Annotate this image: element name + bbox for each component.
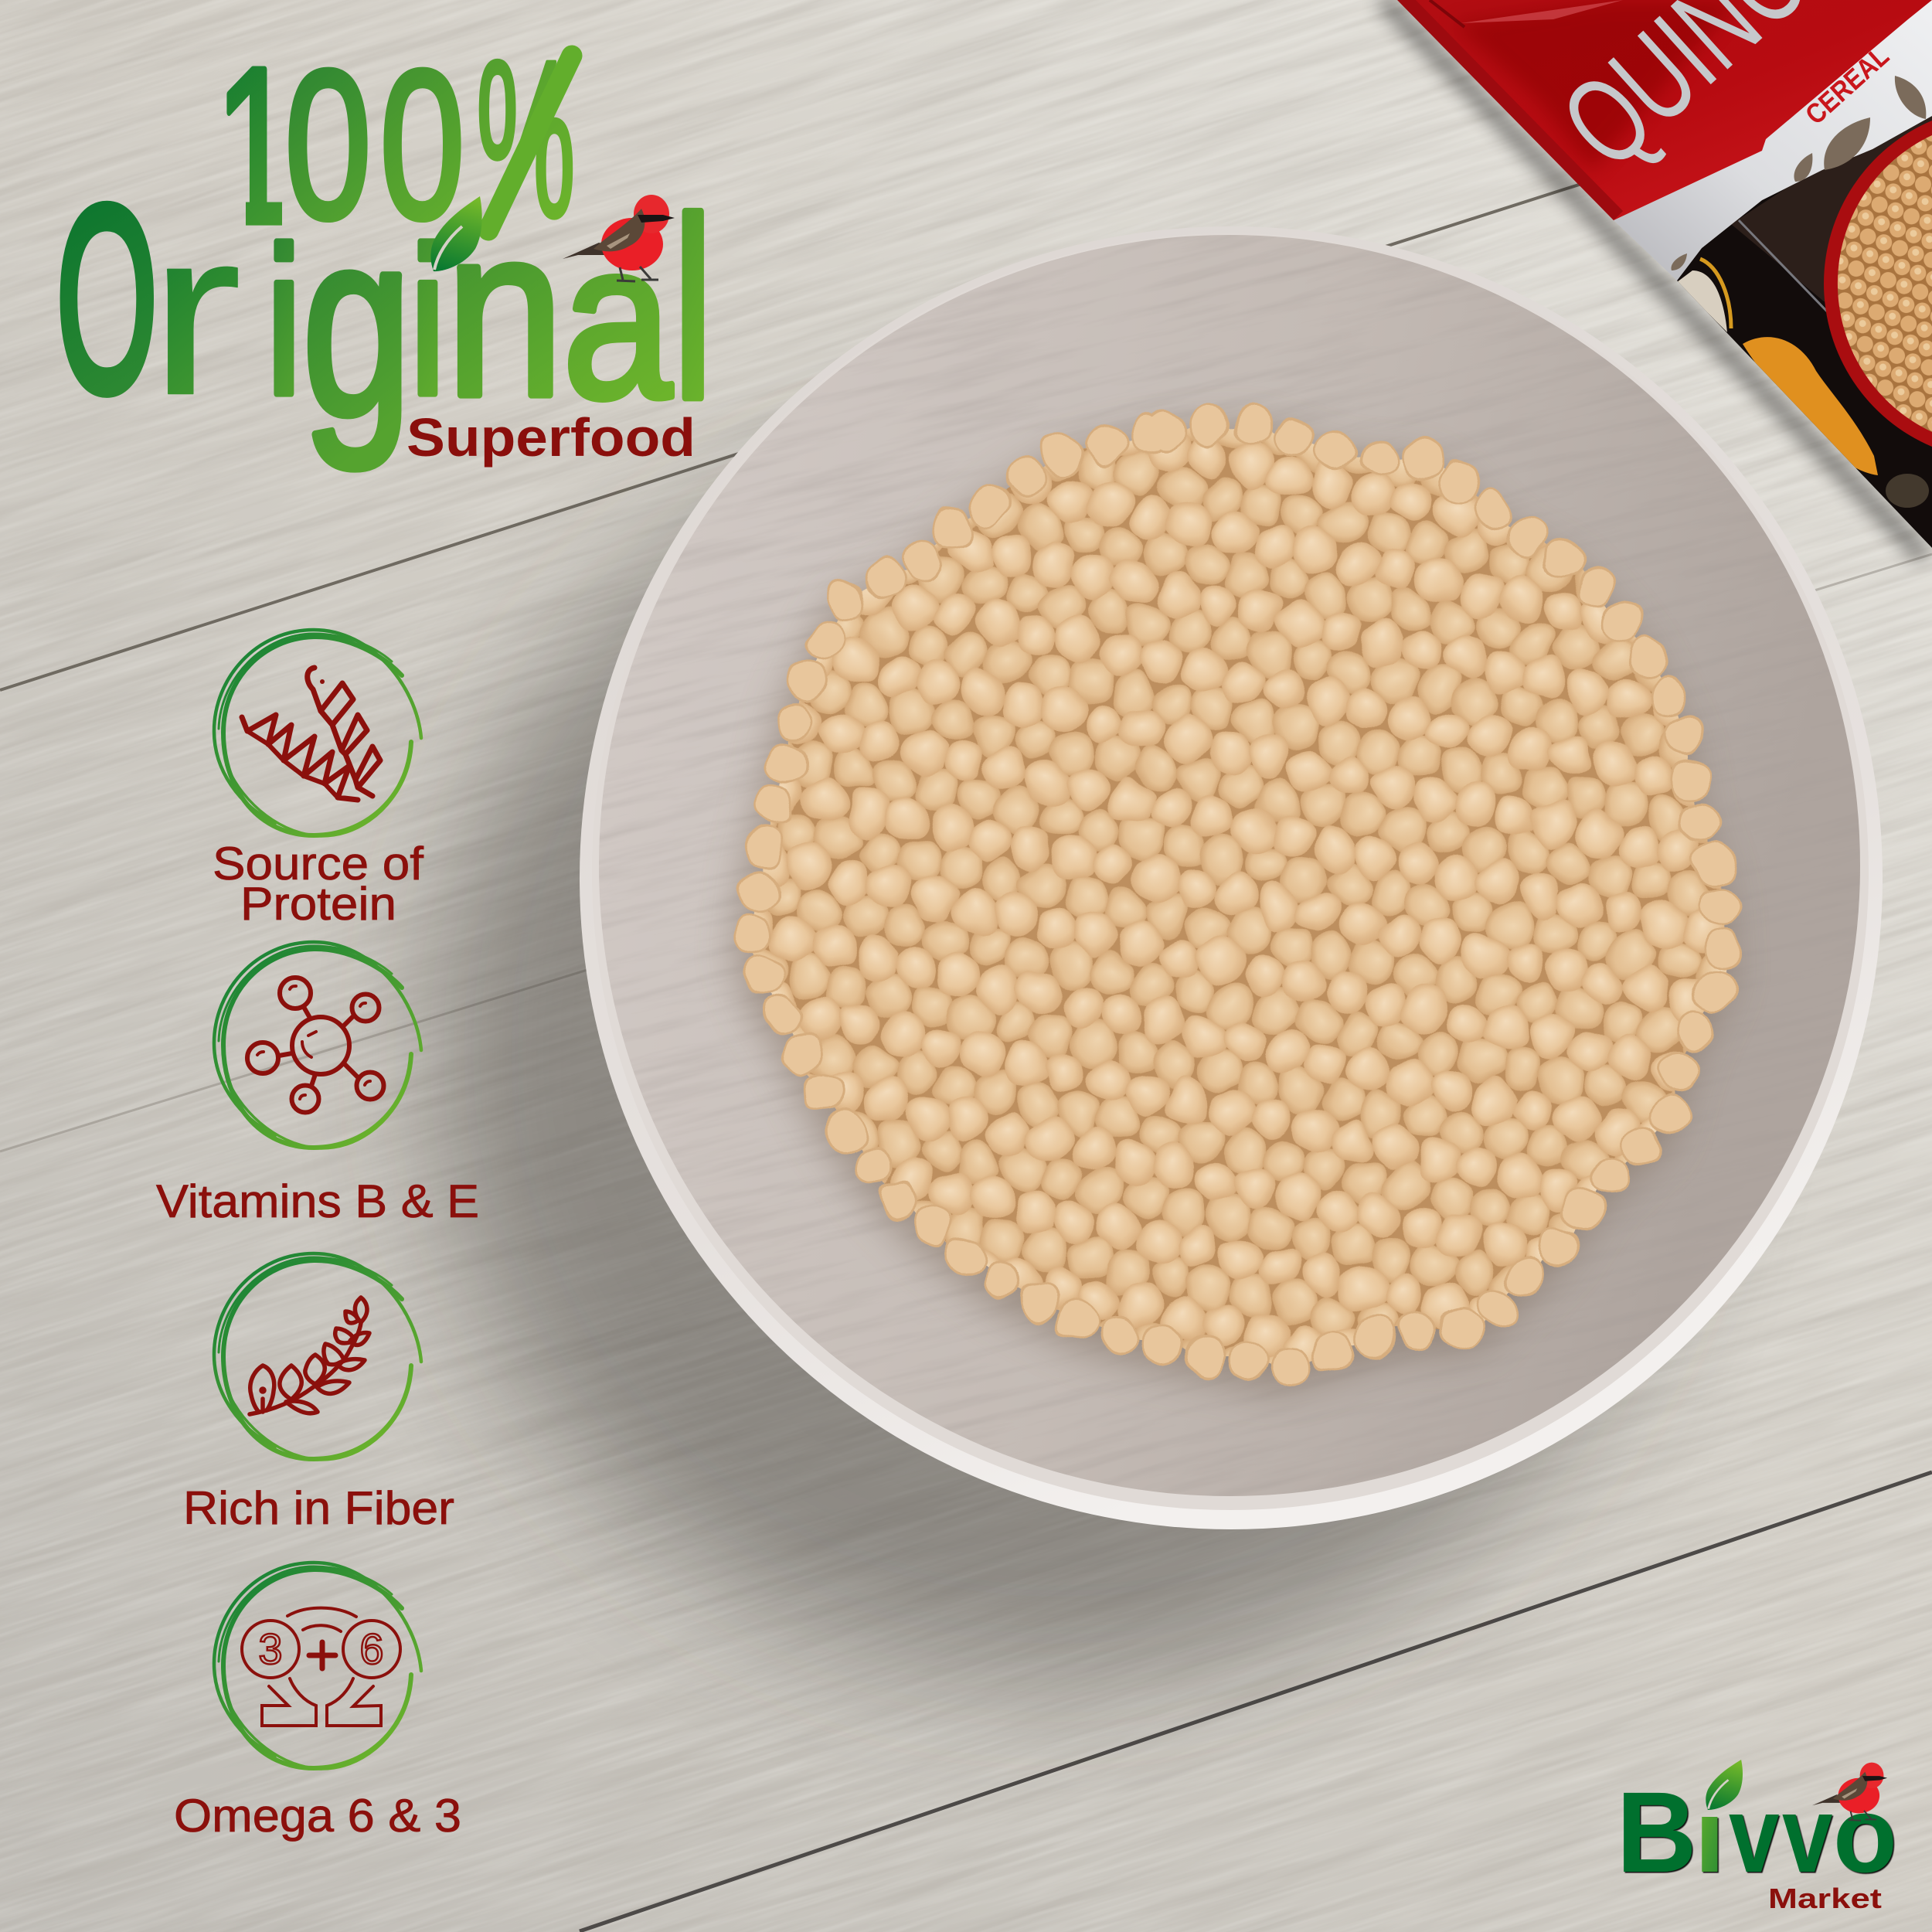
cereal label: CEREAL xyxy=(1799,39,1895,131)
icon: omega 3+6 xyxy=(214,1563,421,1769)
red top panel xyxy=(1397,0,1932,220)
title line: Original: r xyxy=(149,180,242,444)
subtitle: Superfood: Superfood xyxy=(406,407,696,468)
percent slash stroke xyxy=(488,56,572,230)
quinoa pile shadow xyxy=(733,425,1731,1392)
icon: protein helix xyxy=(214,630,421,836)
logo wordmark: B xyxy=(1617,1769,1697,1896)
white label band xyxy=(1614,0,1932,281)
label: Omega 6 & 3 xyxy=(174,1790,461,1842)
product bag xyxy=(1397,0,1932,548)
logo wordmark: i xyxy=(1694,1774,1726,1895)
title line: 100%: 0 xyxy=(380,27,464,263)
bowl rim xyxy=(580,226,1883,1529)
logo leaf xyxy=(1706,1760,1743,1810)
title line: Original: i xyxy=(265,204,303,439)
logo wordmark: o xyxy=(1833,1774,1897,1895)
label: Vitamins B & E xyxy=(156,1175,479,1227)
title line: Original: a xyxy=(563,195,673,444)
bowl shadow on table xyxy=(429,421,1689,1681)
icon: omega 3+6: 6 xyxy=(359,1624,384,1673)
feature: vitamins xyxy=(156,942,479,1227)
brand logo xyxy=(1617,1760,1897,1914)
label: Protein xyxy=(240,878,396,930)
logo wordmark: v xyxy=(1782,1774,1832,1895)
label: Rich in Fiber xyxy=(183,1482,454,1534)
icon: omega 3+6: 3 xyxy=(258,1624,283,1673)
feature: fiber xyxy=(183,1253,454,1534)
title line: Original: n xyxy=(446,177,563,447)
title line: 100%: 1 xyxy=(215,22,297,270)
logo wordmark: v xyxy=(1729,1774,1779,1895)
title line: Original: l xyxy=(672,166,713,452)
title line: Original: O xyxy=(56,151,158,446)
title line: 100%: % xyxy=(476,13,576,264)
red bowl on bag xyxy=(1824,121,1932,447)
icon: title bird xyxy=(563,195,675,281)
title: 100% Original xyxy=(56,13,713,471)
feature: source of protein xyxy=(213,630,437,930)
logo wordmark xyxy=(1617,1769,1897,1896)
bag shadow xyxy=(1383,0,1924,556)
icon: grain stalk xyxy=(214,1253,421,1460)
bag leaves xyxy=(1671,76,1926,270)
title line: Original: g xyxy=(302,176,412,471)
title line: 100% xyxy=(215,13,576,270)
title line: 100%: 0 xyxy=(285,26,371,262)
bowl xyxy=(580,226,1883,1529)
logo subtitle: Market xyxy=(1768,1883,1882,1914)
title line: Original: i xyxy=(409,204,447,439)
bag picture area xyxy=(1677,116,1932,548)
title line: Original xyxy=(56,151,713,471)
logo bird xyxy=(1812,1763,1887,1821)
label: Source of xyxy=(213,838,423,889)
quinoa grains xyxy=(752,425,1725,1367)
icon: molecule xyxy=(214,942,421,1148)
icon: title leaf xyxy=(430,196,482,271)
feature: omega xyxy=(174,1563,461,1842)
bowl interior xyxy=(599,235,1860,1496)
